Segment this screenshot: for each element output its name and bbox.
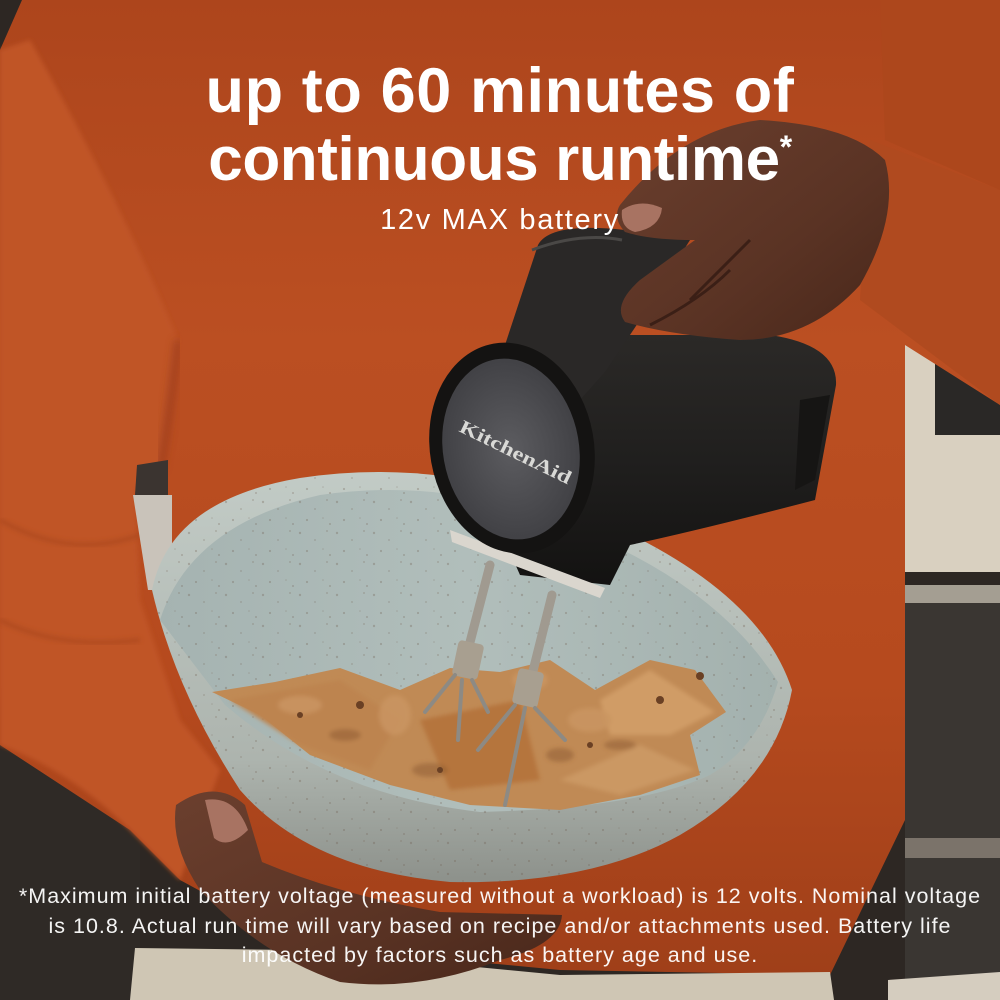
towel [888,972,1000,1000]
subtitle: 12v MAX battery [380,204,620,236]
mixer [413,228,836,598]
title [206,56,794,194]
footnote: is 10.8. Actual run time will vary based on recipe and/or attachments used. Battery life [48,914,952,938]
lower hand [175,792,562,984]
footnote: *Maximum initial battery voltage (measured without a workload) is 12 volts. Nominal voltage [19,884,981,908]
title: continuous runtime* [208,125,792,194]
logo: KitchenAid [456,417,575,489]
footnote [19,884,981,967]
beaters [425,565,565,805]
dough [212,660,726,810]
footnote: impacted by factors such as battery age and use. [242,943,758,967]
bowl [152,472,792,882]
title: up to 60 minutes of [206,56,794,126]
background gap between arm and body [133,460,172,590]
pants [130,948,834,1000]
upper hand [617,120,889,340]
